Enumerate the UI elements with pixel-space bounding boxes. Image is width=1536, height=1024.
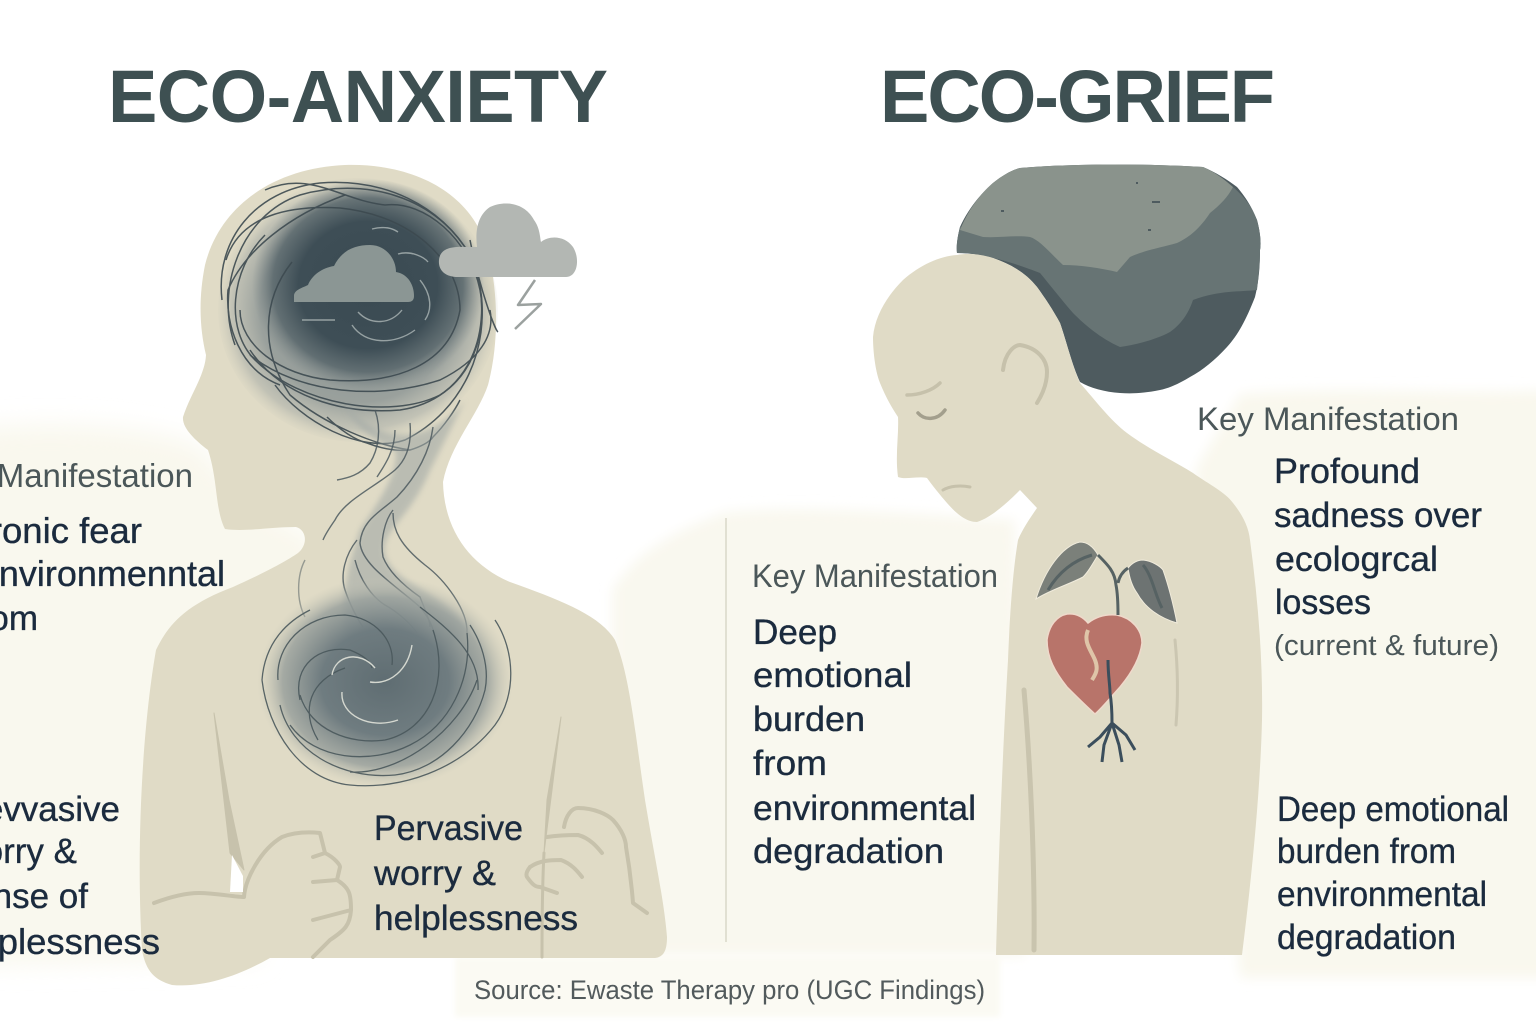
panel divider (725, 518, 727, 942)
text block: centre key manifestation (752, 558, 998, 871)
illustration: eco-grief figure (873, 164, 1262, 955)
icon: swirl in the chest (257, 576, 513, 788)
text block: pervasive worry on torso: helplessness (374, 899, 578, 938)
boulder specks (1001, 183, 1160, 230)
source note: Source: Ewaste Therapy pro (UGC Findings) (474, 975, 985, 1005)
ear, brow, eye and mouth (907, 345, 1177, 950)
icon: inner cloud (294, 245, 414, 302)
chest swirl mass (257, 576, 513, 788)
heart (1047, 614, 1142, 714)
inner swirl highlights (302, 228, 430, 341)
label: Key Manifestation (752, 558, 998, 594)
text block: centre key manifestation: burden (753, 700, 865, 739)
illustration: eco-anxiety figure (140, 165, 667, 985)
current and future note: (current & future) (1274, 630, 1499, 662)
panel: right key manifestation background (1195, 390, 1536, 978)
white gap between arm and torso (230, 855, 243, 892)
label: Key Manifestation (1197, 401, 1459, 437)
left leaf (1036, 542, 1098, 599)
arm and hand creases (154, 713, 647, 957)
text block: right key manifestation: losses (1275, 583, 1371, 622)
text block: right key manifestation: sadness over (1274, 496, 1482, 535)
text block: centre key manifestation: from (753, 744, 827, 783)
panel: left key manifestation background (0, 424, 320, 965)
scribble stream through neck (299, 400, 470, 660)
stream wash (344, 400, 470, 660)
cloud (439, 203, 577, 277)
text block: right key manifestation: burden from (1277, 832, 1456, 871)
icon: storm in the head (218, 178, 498, 450)
text block: pervasive worry on torso: Pervasive (374, 809, 523, 848)
spiral lines (262, 607, 511, 786)
text block: centre key manifestation: emotional (753, 656, 912, 695)
icon: broken heart with sprout and roots (1036, 542, 1177, 762)
grey wash under the storm (218, 178, 498, 442)
boulder mid facet (957, 187, 1261, 347)
text block: right key manifestation: degradation (1277, 918, 1456, 957)
title: eco-grief: ECO-GRIEF (880, 55, 1275, 138)
text block: right key manifestation: ecologrcal (1275, 540, 1438, 579)
lightning bolt (515, 280, 541, 329)
deep emotional burden text: Deep (753, 613, 837, 652)
title: eco-anxiety: ECO-ANXIETY (108, 55, 608, 138)
pale spiral highlights (332, 645, 412, 723)
boulder light top facet (960, 164, 1233, 272)
text block: right key manifestation (1197, 401, 1509, 957)
boulder dark base (957, 164, 1261, 393)
text block: centre key manifestation: degradation (753, 832, 944, 871)
figure silhouette (873, 254, 1262, 955)
deep emotional burden text: Deep emotional (1277, 790, 1509, 829)
boulder (957, 164, 1261, 393)
figure silhouette (140, 165, 667, 985)
text block: centre key manifestation: environmental (753, 789, 976, 828)
scribbled worry lines (221, 182, 498, 450)
stem (1048, 555, 1162, 615)
icon: outer grey cloud with lightning (439, 203, 577, 329)
heart crack (1086, 630, 1097, 680)
right leaf (1128, 560, 1177, 623)
dark storm cloud mass (252, 179, 484, 391)
panel: source note background (455, 957, 1000, 1017)
panel: centre key manifestation background (612, 509, 1025, 956)
text block: pervasive worry on torso (373, 809, 578, 938)
text block: left key manifestation (0, 457, 225, 962)
text block: right key manifestation: environmental (1277, 875, 1487, 914)
text block: pervasive worry on torso: worry & (373, 854, 496, 893)
stream lines (299, 410, 467, 633)
profound sadness text: Profound (1274, 452, 1420, 491)
roots (1088, 660, 1135, 762)
